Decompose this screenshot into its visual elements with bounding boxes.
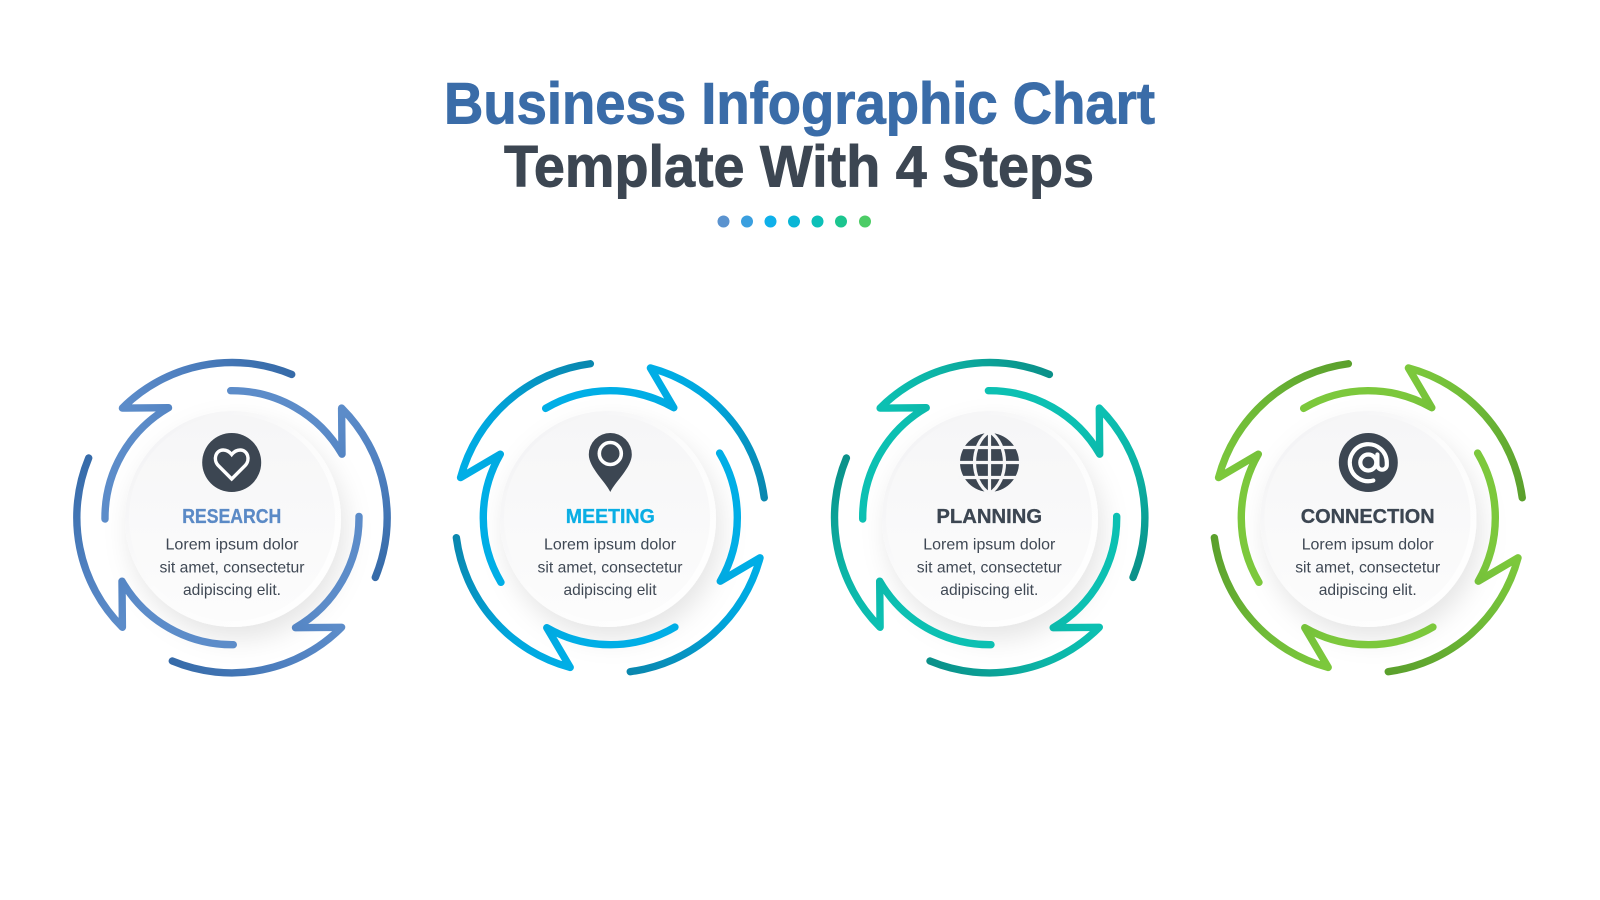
heading: planning: PLANNING: [936, 506, 1042, 528]
disc: [1260, 411, 1476, 627]
panel: research: [77, 363, 387, 673]
panel: planning: [835, 363, 1145, 673]
text: planning: adipiscing elit.: [940, 582, 1038, 599]
title line 1: Business Infographic Chart: [444, 72, 1155, 136]
text: connection: sit amet, consectetur: [1295, 559, 1441, 576]
title: [444, 72, 1155, 200]
text: connection: adipiscing elit.: [1319, 582, 1417, 599]
panel: connection: [1156, 306, 1580, 730]
icon: at sign: [1339, 433, 1398, 492]
icon: heart: [202, 433, 261, 492]
dotted divider: [718, 216, 871, 228]
disc: [882, 411, 1098, 627]
icon: globe: [958, 432, 1020, 494]
ring arrows: [398, 306, 822, 730]
text: meeting: Lorem ipsum dolor: [544, 536, 677, 554]
panel: meeting: [398, 306, 822, 730]
ring arrows: [835, 363, 1145, 673]
text: research: sit amet, consectetur: [160, 559, 305, 576]
heading: meeting: MEETING: [566, 506, 655, 528]
text: planning: sit amet, consectetur: [917, 559, 1062, 576]
text: meeting: adipiscing elit: [564, 582, 657, 599]
heading: connection: CONNECTION: [1301, 506, 1435, 528]
text: planning: [917, 536, 1062, 599]
text: connection: [1295, 536, 1441, 599]
icon: map pin: [589, 433, 632, 492]
title line 2: Template With 4 Steps: [504, 134, 1094, 200]
text: planning: Lorem ipsum dolor: [923, 536, 1056, 554]
heading: research: RESEARCH: [182, 506, 281, 528]
disc: [125, 411, 341, 627]
text: meeting: sit amet, consectetur: [538, 559, 683, 576]
ring arrows: [77, 363, 387, 673]
text: research: [160, 536, 305, 599]
text: connection: Lorem ipsum dolor: [1302, 536, 1434, 554]
ring arrows: [1156, 306, 1580, 730]
text: meeting: [538, 536, 683, 599]
disc: [500, 411, 716, 627]
text: research: Lorem ipsum dolor: [166, 536, 299, 554]
text: research: adipiscing elit.: [183, 582, 281, 599]
